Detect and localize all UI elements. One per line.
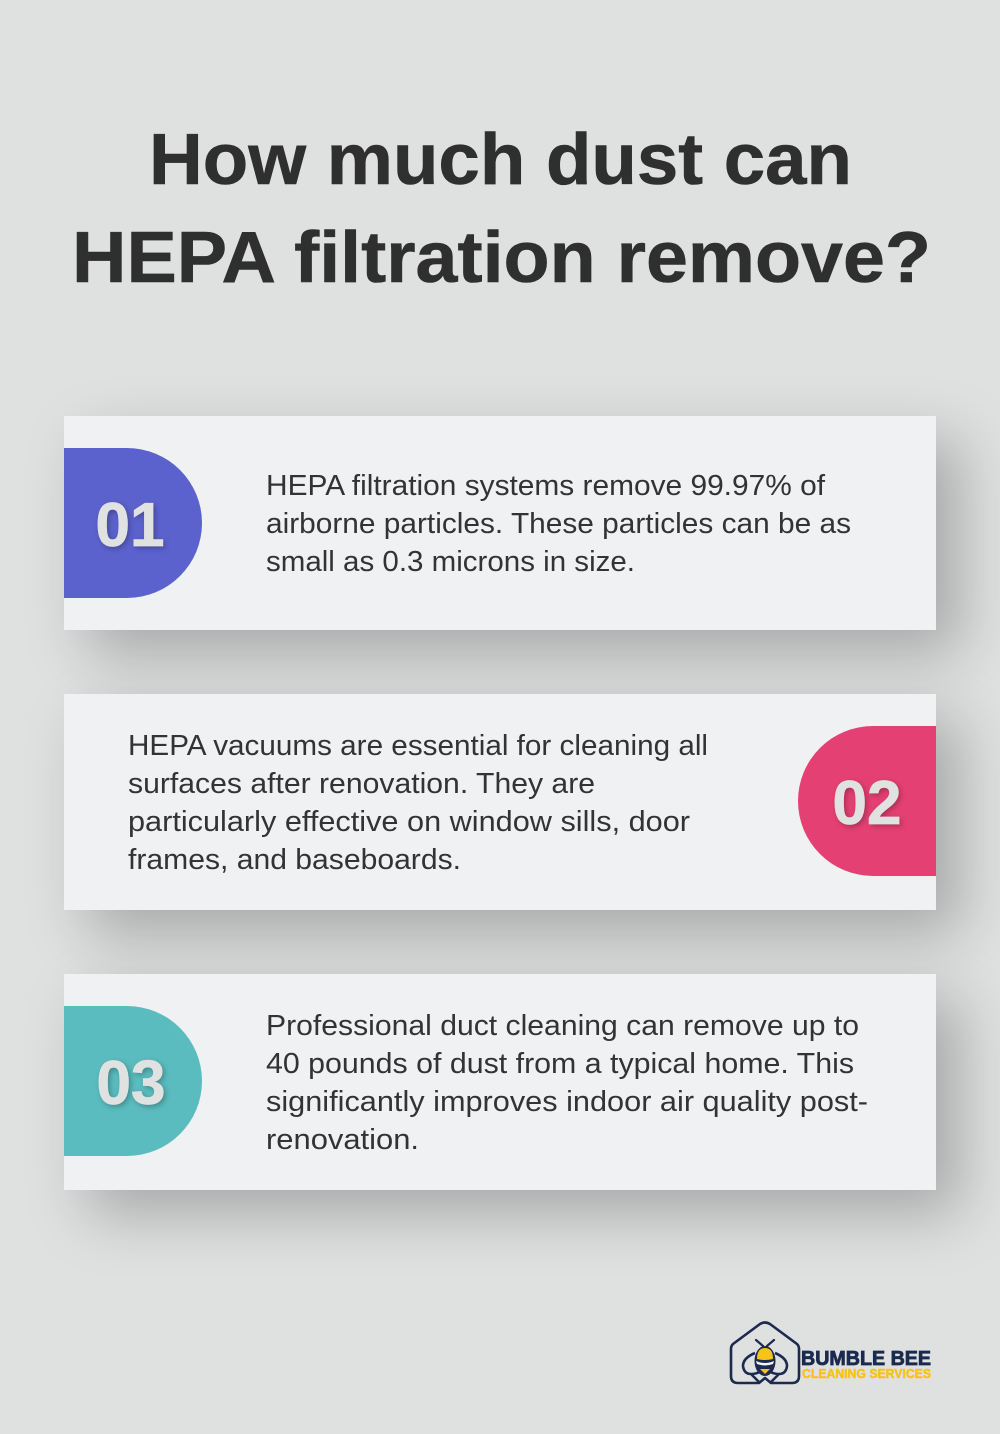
- text: step 01 description: airborne particles. These particles can be as: [266, 508, 851, 540]
- logo: Bumble Bee Cleaning Services: [730, 1321, 931, 1384]
- text: step 03 description: significantly improves indoor air quality post-: [266, 1086, 868, 1118]
- badge: 02: 02: [833, 769, 901, 838]
- text: step 02 description: [128, 730, 708, 876]
- text: step 02 description: HEPA vacuums are essential for cleaning all: [128, 730, 708, 762]
- badge: 02: [798, 726, 936, 876]
- title: How much dust can: [149, 120, 852, 200]
- text: step 03 description: renovation.: [266, 1124, 419, 1156]
- text: step 02 description: particularly effective on window sills, door: [128, 806, 690, 838]
- text: step 03 description: Professional duct cleaning can remove up to: [266, 1010, 859, 1042]
- wordmark: BUMBLE BEE: [801, 1348, 931, 1370]
- text: step 01 description: small as 0.3 microns in size.: [266, 546, 635, 578]
- wordmark: CLEANING SERVICES: [802, 1367, 931, 1381]
- text: step 01 description: HEPA filtration systems remove 99.97% of: [266, 470, 826, 502]
- badge: 01: 01: [96, 491, 164, 560]
- title: HEPA filtration remove?: [72, 218, 931, 298]
- title: [72, 120, 931, 298]
- badge: 03: 03: [97, 1049, 165, 1118]
- wordmark: [801, 1348, 931, 1381]
- panel: step 03: [64, 974, 936, 1190]
- badge: 03: [64, 1006, 202, 1156]
- text: step 02 description: surfaces after renovation. They are: [128, 768, 595, 800]
- panel: step 02: [64, 694, 936, 910]
- panel: step 01: [64, 416, 936, 630]
- text: step 01 description: [266, 470, 851, 578]
- icon: house outline with bee: [731, 1322, 799, 1383]
- text: step 03 description: 40 pounds of dust from a typical home. This: [266, 1048, 854, 1080]
- badge: 01: [64, 448, 202, 598]
- text: step 03 description: [266, 1010, 868, 1156]
- text: step 02 description: frames, and baseboards.: [128, 844, 461, 876]
